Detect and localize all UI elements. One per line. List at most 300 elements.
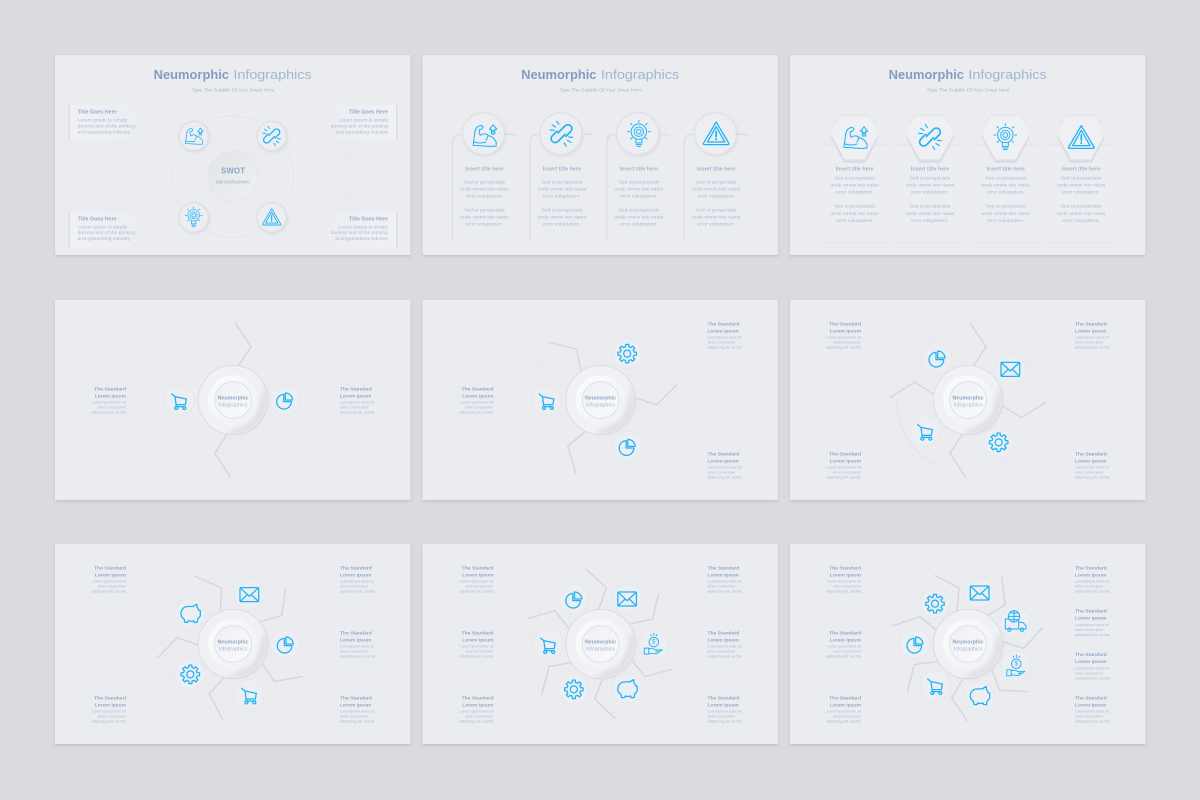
text block: top right: amet consectetur — [707, 584, 736, 588]
card 4: Sed ut perspiciatis — [1061, 175, 1102, 181]
column 4: Sed ut perspiciatis — [696, 180, 737, 186]
text block: right 4: adipiscing elit, sechte — [1075, 719, 1110, 723]
faint outer arcs — [185, 329, 287, 471]
text block: bottom left: The Standard — [462, 696, 493, 702]
text block: right 1: adipiscing elit, sechte — [1075, 589, 1110, 593]
card 2: unde omnis iste natus — [906, 183, 955, 189]
icon: money hand: $ — [652, 640, 656, 646]
text block: bottom left — [826, 452, 862, 479]
icon: cart — [234, 679, 264, 709]
card 1: error voluptatem. — [836, 190, 874, 196]
text block: top right: amet consectetur — [340, 584, 369, 588]
column 4: Insert title here — [697, 166, 735, 172]
column 1 — [452, 113, 516, 241]
text block: bottom left — [826, 696, 862, 723]
text block: middle left: Lorem ipsumdolor sit — [460, 644, 493, 648]
column 1: Insert title here — [465, 166, 504, 172]
text block: top left: amet consectetur — [833, 584, 862, 588]
icon: money hand — [638, 629, 668, 659]
text block: middle right: Lorem Ipsum — [340, 638, 372, 644]
text block: top left: Lorem Ipsum — [462, 573, 494, 579]
text block: right: Loremipsum dolor sit — [340, 400, 374, 404]
text block: middle right — [340, 631, 375, 658]
faint outer arc — [531, 575, 670, 713]
card 4: error voluptatem. — [1062, 190, 1100, 196]
text block: right 3 — [1075, 652, 1110, 680]
icon: mail — [612, 584, 642, 614]
panel: six-item radial — [422, 544, 778, 744]
text block: right 2: Loremipsum dolor sit — [1075, 623, 1109, 627]
text box: bottom right — [311, 212, 397, 248]
text block: bottom right: amet consectetur — [1075, 470, 1104, 474]
panel: four-item radial — [790, 300, 1145, 500]
card 2: error voluptatem. — [911, 218, 949, 224]
zigzag dividers — [215, 323, 251, 477]
faint outer arc — [899, 575, 1037, 713]
text block: middle left: Lorem Ipsum — [830, 638, 862, 644]
icon: cart — [533, 629, 563, 659]
card 3: error voluptatem. — [987, 190, 1025, 196]
icon: pie chart — [270, 629, 300, 659]
column 1: error voluptatem. — [466, 222, 503, 228]
text block: middle left: adipiscing elit, sechte — [459, 654, 493, 658]
text block: bottom left: Lorem Ipsum — [95, 703, 127, 709]
text box: top right: Lorem Ipsum is simply — [338, 118, 388, 124]
text block: top left: amet consectetur — [465, 584, 494, 588]
centre circle — [208, 151, 258, 202]
text block: middle right: The Standard — [340, 631, 372, 637]
column 3: Insert title here — [620, 166, 658, 172]
column 4: error voluptatem. — [697, 194, 735, 200]
text block: bottom left: Lorem Ipsum — [830, 703, 862, 709]
text block: bottom right: The Standard — [707, 696, 739, 702]
icon: piggy bank — [175, 598, 205, 628]
icon: money hand: $ — [1015, 661, 1019, 667]
text block: bottom left: amet consectetur — [98, 714, 127, 718]
text block: bottom left: adipiscing elit, sechte — [826, 719, 861, 723]
text block: middle right: Loremipsum dolor sit — [707, 644, 741, 648]
text block: top right — [707, 322, 742, 349]
column 3: unde omnis iste natus — [615, 215, 664, 221]
faint outer arcs — [897, 329, 1038, 471]
card 2: error voluptatem. — [911, 190, 949, 196]
text box: bottom left: Lorem Ipsum is simply — [78, 224, 128, 230]
text block: left: Lorem Ipsum — [95, 394, 127, 400]
column 3 — [607, 113, 670, 241]
text block: top right: Loremipsum dolor sit — [340, 579, 374, 583]
text block: top left: Lorem ipsumdolor sit — [827, 579, 861, 583]
centre hub: Infographics — [218, 403, 248, 409]
text block: bottom right: amet consectetur — [340, 714, 369, 718]
text block: bottom right: adipiscing elit, sechte — [1075, 475, 1110, 479]
text box: bottom right: Title Goes Here — [349, 216, 388, 222]
text block: right 2 — [1075, 609, 1110, 637]
text block: bottom left: Lorem ipsumdolor sit — [92, 709, 126, 713]
text block: middle left: The Standard — [829, 631, 861, 637]
icon: pie chart — [900, 629, 930, 659]
icon: cart — [164, 385, 194, 415]
text block: left: The Standard — [94, 387, 126, 393]
text block: bottom right: amet consectetur — [707, 714, 736, 718]
text block: right 1: The Standard — [1075, 566, 1107, 572]
icon: opportunity — [175, 199, 212, 236]
text box: bottom left: and typesetting industry — [78, 236, 131, 242]
text block: bottom right: Loremipsum dolor sit — [1075, 465, 1109, 469]
icon: piggy bank — [612, 674, 642, 704]
panel: seven-item radial — [790, 544, 1145, 744]
text block: middle right — [707, 631, 742, 658]
text block: right 1 — [1075, 566, 1110, 593]
card 4: Insert title here — [1062, 166, 1100, 172]
panel: two-item radial — [55, 300, 410, 500]
centre hub: Neumorphic — [217, 639, 249, 645]
text block: bottom right: amet consectetur — [707, 470, 736, 474]
centre hub: Infographics — [218, 647, 248, 653]
text block: bottom right: Loremipsum dolor sit — [707, 709, 741, 713]
text box: top left: and typesetting industry — [78, 129, 131, 135]
text block: top right: amet consectetur — [707, 340, 736, 344]
centre hub: Infographics — [953, 403, 983, 409]
column 2: Sed ut perspiciatis — [541, 208, 583, 214]
column 3: error voluptatem. — [620, 222, 658, 228]
card 2: Sed ut perspiciatis — [910, 204, 951, 210]
text block: right 1: amet consectetur — [1075, 584, 1104, 588]
centre hub — [566, 609, 635, 679]
text box: top left — [69, 105, 155, 141]
text block: top right: Lorem Ipsum — [707, 329, 739, 335]
column 2: unde omnis iste natus — [538, 215, 587, 221]
zigzag dividers — [892, 576, 1043, 721]
text block: top left: The Standard — [462, 566, 493, 572]
title — [889, 67, 1047, 82]
text block: left: Lorem Ipsum — [462, 394, 494, 400]
column 3: Sed ut perspiciatis — [618, 180, 660, 186]
column 2: Insert title here — [543, 166, 581, 172]
text block: middle left: amet consectetur — [833, 649, 862, 653]
text block: left — [459, 387, 494, 414]
text block: top right: adipiscing elit, sechte — [707, 345, 742, 349]
title — [521, 67, 680, 82]
text block: top left: The Standard — [829, 566, 861, 572]
text block: bottom left: Lorem ipsumdolor sit — [460, 709, 493, 713]
icon: mail — [234, 580, 264, 610]
panel: three-item radial — [422, 300, 778, 500]
centre hub — [198, 609, 268, 679]
text block: top left: The Standard — [829, 322, 861, 328]
icon: weakness — [253, 117, 290, 155]
icon: piggy bank — [965, 681, 995, 711]
panel: SWOT infographic — [55, 55, 410, 255]
text block: right 3: amet consectetur — [1075, 671, 1104, 675]
text block: right 3: The Standard — [1075, 652, 1107, 658]
subtitle: Type The Subtitle Of Your Great Here — [927, 87, 1010, 93]
zigzag dividers — [157, 577, 302, 720]
centre label: INFOGRAPHIC — [216, 180, 250, 186]
zigzag dividers — [527, 569, 672, 718]
column 4: error voluptatem. — [697, 222, 735, 228]
text block: right 4 — [1075, 696, 1110, 723]
text block: middle left: Lorem Ipsum — [462, 638, 494, 644]
text block: bottom right: Lorem Ipsum — [1075, 459, 1107, 465]
text block: middle left: adipiscing elit, sechte — [826, 654, 861, 658]
text block: bottom left: adipiscing elit, sechte — [826, 475, 861, 479]
centre hub: Neumorphic — [585, 395, 616, 401]
text block: middle right: amet consectetur — [340, 649, 369, 653]
icon: cart — [532, 385, 562, 415]
text block: top right: Lorem Ipsum — [340, 573, 372, 579]
text block: right 4: Loremipsum dolor sit — [1075, 709, 1109, 713]
text block: bottom left: adipiscing elit, sechte — [91, 719, 126, 723]
text block: middle right: amet consectetur — [707, 649, 736, 653]
text block: right 1: Lorem Ipsum — [1075, 573, 1107, 579]
outer ring — [171, 114, 295, 239]
column 1: Sed ut perspiciatis — [464, 180, 505, 186]
text block: top left: Lorem Ipsum — [95, 573, 127, 579]
icon: mail — [965, 578, 995, 608]
card 4: unde omnis iste natus — [1057, 211, 1106, 217]
text block: top left: amet consectetur — [833, 340, 862, 344]
column 1: unde omnis iste natus — [460, 215, 509, 221]
text box: bottom left: dummy text of the printing — [78, 230, 135, 236]
text block: right: adipiscing elit, sechte — [340, 410, 375, 414]
card 3: Sed ut perspiciatis — [985, 204, 1027, 210]
text block: bottom right — [707, 452, 742, 479]
text box: bottom right: and typesetting industry — [335, 236, 388, 242]
column 4: unde omnis iste natus — [692, 215, 741, 221]
text block: bottom left: amet consectetur — [465, 714, 494, 718]
faint outer arcs — [530, 348, 671, 471]
text block: middle left — [459, 631, 494, 658]
column 1: Sed ut perspiciatis — [464, 208, 505, 214]
text block: bottom left — [459, 696, 494, 723]
column 4: Sed ut perspiciatis — [696, 208, 737, 214]
text block: right: Lorem Ipsum — [340, 394, 372, 400]
card 3 — [973, 115, 1039, 242]
text block: top left: Lorem ipsumdolor sit — [827, 335, 861, 339]
card 1: Sed ut perspiciatis — [834, 175, 876, 181]
icon: gear — [559, 674, 589, 704]
text block: top left — [826, 322, 862, 349]
column 3: Sed ut perspiciatis — [618, 208, 660, 214]
text block: middle right: Lorem Ipsum — [707, 638, 739, 644]
icon: pie chart — [922, 343, 952, 373]
text block: top right: amet consectetur — [1075, 340, 1104, 344]
icon: cart — [910, 416, 940, 446]
text block: right: amet consectetur — [340, 405, 369, 409]
text block: top right: Lorem Ipsum — [1075, 329, 1107, 335]
text block: left: amet consectetur — [98, 405, 127, 409]
faint outer arc — [164, 575, 302, 713]
icon: gear — [175, 659, 205, 689]
text block: middle left — [826, 631, 862, 658]
centre hub: Neumorphic — [217, 395, 249, 401]
text box: top right: Title Goes Here — [349, 110, 388, 116]
centre label: SWOT — [221, 167, 245, 176]
icon: gear — [612, 339, 642, 369]
text block: middle right: The Standard — [707, 631, 739, 637]
text box: bottom left — [69, 212, 155, 248]
column 4: unde omnis iste natus — [692, 187, 741, 193]
text block: right 4: amet consectetur — [1075, 714, 1104, 718]
text box: bottom right: Lorem Ipsum is simply — [338, 224, 388, 230]
title: Neumorphic — [889, 67, 965, 82]
text block: top right: The Standard — [340, 566, 372, 572]
card 1: Sed ut perspiciatis — [834, 204, 876, 210]
text block: middle right: adipiscing elit, sechte — [340, 654, 375, 658]
column 2: Sed ut perspiciatis — [541, 180, 583, 186]
text block: top right — [1075, 322, 1110, 349]
text block: top left: The Standard — [94, 566, 126, 572]
text block: bottom right: The Standard — [707, 452, 739, 458]
text block: top right: The Standard — [707, 322, 739, 328]
text block: bottom left: The Standard — [829, 452, 861, 458]
card 2: Sed ut perspiciatis — [910, 175, 951, 181]
zigzag dividers — [890, 323, 1045, 477]
text block: right — [340, 387, 375, 414]
text block: right 3: adipiscing elit, sechte — [1075, 676, 1110, 680]
text block: bottom right: adipiscing elit, sechte — [340, 719, 375, 723]
text box: top left: Title Goes Here — [78, 110, 117, 116]
column 1: unde omnis iste natus — [460, 187, 509, 193]
text block: top left — [459, 566, 494, 593]
text block: top left: adipiscing elit, sechte — [459, 589, 493, 593]
text block: bottom right: adipiscing elit, sechte — [707, 719, 742, 723]
card 2 — [897, 115, 963, 242]
card 1: error voluptatem. — [836, 218, 874, 224]
text block: left — [91, 387, 127, 414]
text block: bottom right: Loremipsum dolor sit — [707, 465, 741, 469]
text block: right: The Standard — [340, 387, 372, 393]
card 3: unde omnis iste natus — [981, 211, 1030, 217]
text block: bottom left — [91, 696, 127, 723]
column 3: error voluptatem. — [620, 194, 658, 200]
centre hub: Infographics — [586, 647, 615, 653]
text block: left: adipiscing elit, sechte — [91, 410, 126, 414]
text block: bottom left: amet consectetur — [833, 714, 862, 718]
column 1: error voluptatem. — [466, 194, 503, 200]
panel: five-item radial — [55, 544, 410, 744]
text box: top right — [311, 105, 397, 141]
title: Infographics — [968, 67, 1047, 82]
text block: bottom right: Loremipsum dolor sit — [340, 709, 374, 713]
text block: middle left: The Standard — [462, 631, 493, 637]
panel: round icon columns — [422, 55, 778, 255]
text block: left: amet consectetur — [465, 405, 494, 409]
card 4: Sed ut perspiciatis — [1061, 204, 1102, 210]
card 4: unde omnis iste natus — [1057, 183, 1106, 189]
icon: cart — [920, 670, 950, 700]
text block: left: The Standard — [462, 387, 493, 393]
centre hub: Neumorphic — [952, 639, 984, 645]
text box: top right: dummy text of the printing — [331, 123, 388, 129]
card 3: unde omnis iste natus — [981, 183, 1030, 189]
card 3: error voluptatem. — [987, 218, 1025, 224]
icon: money hand — [1001, 651, 1031, 681]
text block: top left: adipiscing elit, sechte — [826, 589, 861, 593]
subtitle: Type The Subtitle Of Your Great Here — [192, 87, 275, 93]
text block: top left: Lorem ipsumdolor sit — [92, 579, 126, 583]
centre hub — [933, 365, 1003, 435]
text block: middle left: amet consectetur — [465, 649, 494, 653]
title — [154, 67, 312, 82]
text block: top right — [340, 566, 375, 593]
text block: left: adipiscing elit, sechte — [459, 410, 493, 414]
card 4 — [1048, 115, 1114, 242]
title: Neumorphic — [521, 67, 597, 82]
card 1: Insert title here — [836, 166, 874, 172]
connector curves — [111, 141, 354, 212]
text block: bottom left: The Standard — [829, 696, 861, 702]
text block: top right: Lorem Ipsum — [707, 573, 739, 579]
text block: top left: Lorem Ipsum — [830, 573, 862, 579]
text block: right 3: Loremipsum dolor sit — [1075, 666, 1109, 670]
text block: top right: Loremipsum dolor sit — [1075, 335, 1109, 339]
text block: top left — [826, 566, 862, 593]
text block: bottom right: Lorem Ipsum — [340, 703, 372, 709]
text block: top left — [91, 566, 127, 593]
text block: bottom left: Lorem ipsumdolor sit — [827, 709, 861, 713]
text block: right 2: adipiscing elit, sechte — [1075, 633, 1110, 637]
text block: top right: adipiscing elit, sechte — [707, 589, 742, 593]
subtitle: Type The Subtitle Of Your Great Here — [559, 87, 642, 93]
text block: top right: Loremipsum dolor sit — [707, 335, 741, 339]
title: Infographics — [233, 67, 312, 82]
text block: right 2: amet consectetur — [1075, 628, 1104, 632]
text block: top right: Loremipsum dolor sit — [707, 579, 741, 583]
text block: bottom left: The Standard — [94, 696, 126, 702]
icon: strength — [175, 117, 212, 155]
text block: bottom left: Lorem ipsumdolor sit — [827, 465, 861, 469]
column 4 — [684, 113, 747, 241]
card 1: unde omnis iste natus — [830, 183, 879, 189]
card 1 — [822, 115, 888, 242]
text box: top left: Lorem Ipsum is simply — [78, 118, 128, 124]
text block: middle right: adipiscing elit, sechte — [707, 654, 742, 658]
icon: threat — [253, 199, 290, 236]
text block: bottom right — [340, 696, 375, 723]
text block: top right: The Standard — [1075, 322, 1107, 328]
text block: left: Lorem ipsumdolor sit — [460, 400, 493, 404]
text block: top left: amet consectetur — [98, 584, 127, 588]
text block: top right: adipiscing elit, sechte — [340, 589, 375, 593]
text block: bottom right — [707, 696, 742, 723]
centre hub — [566, 365, 635, 435]
column 2: unde omnis iste natus — [538, 187, 587, 193]
title: Neumorphic — [154, 67, 230, 82]
icon: pie chart — [270, 385, 300, 415]
text block: right 2: Lorem Ipsum — [1075, 616, 1107, 622]
card 3: Sed ut perspiciatis — [985, 175, 1027, 181]
text block: bottom left: adipiscing elit, sechte — [459, 719, 493, 723]
column 2: error voluptatem. — [543, 194, 581, 200]
text block: bottom left: Lorem Ipsum — [830, 459, 862, 465]
text block: top right — [707, 566, 742, 593]
text block: bottom right — [1075, 452, 1110, 479]
text block: right 2: The Standard — [1075, 609, 1107, 615]
icon: pie chart — [612, 431, 642, 461]
text block: right 3: Lorem Ipsum — [1075, 659, 1107, 665]
centre hub: Neumorphic — [585, 639, 616, 645]
centre hub — [198, 365, 268, 435]
text block: top left: adipiscing elit, sechte — [91, 589, 126, 593]
text box: top right: and typesetting industry — [335, 129, 388, 135]
text block: top right: The Standard — [707, 566, 739, 572]
text box: bottom right: dummy text of the printing — [331, 230, 388, 236]
centre hub — [933, 609, 1003, 679]
icon: gear — [920, 589, 950, 619]
centre hub: Infographics — [953, 647, 983, 653]
text block: top left: Lorem Ipsum — [830, 329, 862, 335]
